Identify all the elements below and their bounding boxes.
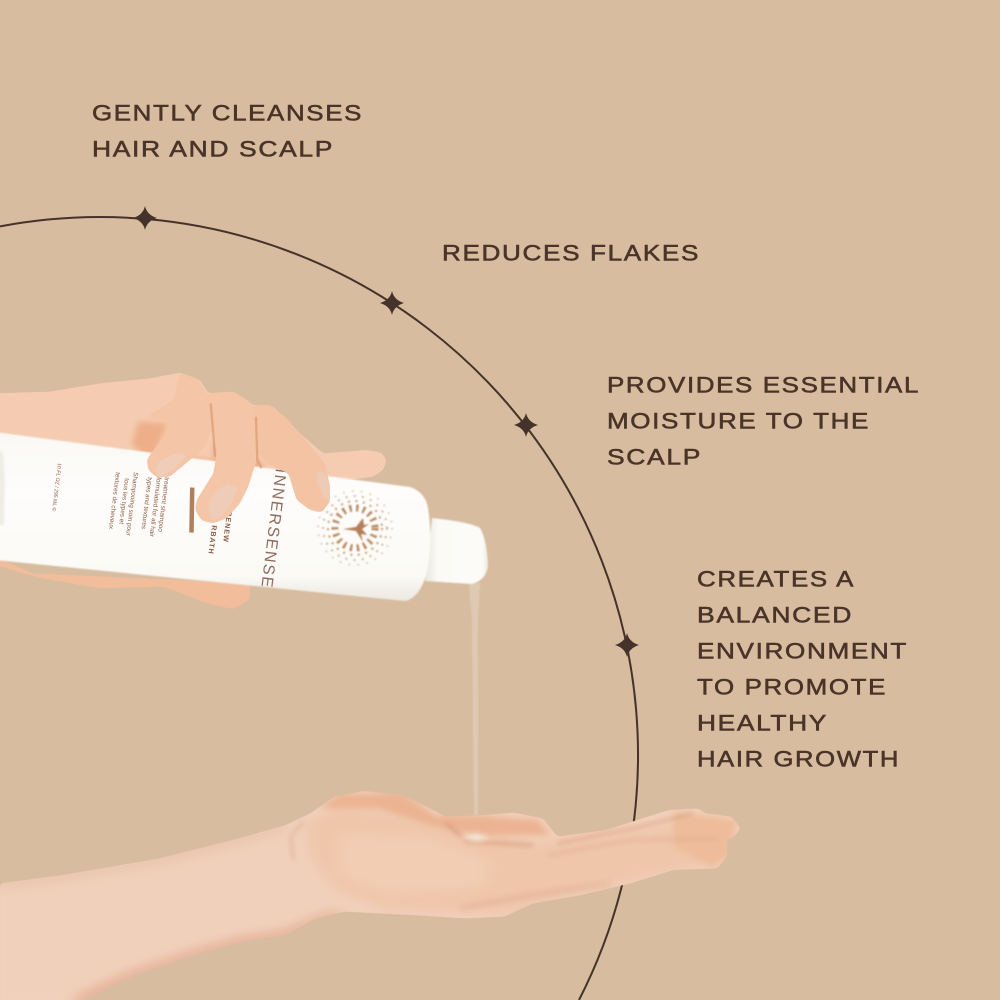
text: balanced environment: BALANCED [697,602,853,628]
product name [206,511,234,555]
description text: tous les types et [117,478,130,525]
bottle label [50,463,392,590]
description text [107,472,170,538]
description text: treatment shampoo [156,477,170,533]
text: balanced environment [697,566,908,772]
description text: textures de cheveux [107,472,121,530]
bottle nozzle [425,518,488,584]
index finger [147,373,212,477]
text: gently cleanses: HAIR AND SCALP [92,136,334,162]
icon: star marker 4 [615,633,639,657]
text: balanced environment: CREATES A [697,566,855,592]
brand name: INNERSENSE [257,468,289,590]
text: gently cleanses: GENTLY CLEANSES [92,100,363,126]
ring finger [253,405,330,513]
index fingernail [156,453,185,477]
text: balanced environment: HEALTHY [697,710,828,736]
icon: star marker 2 [380,291,404,315]
arc line [0,217,638,1000]
icon: star marker 3 [514,413,538,437]
middle fingernail [208,484,237,520]
text: essential moisture [607,372,920,470]
upper hand fingers [147,373,330,523]
description text: formulated for all hair [148,477,162,538]
finger creases [211,403,262,468]
icon: brand sunburst logo [318,491,392,565]
fingernails [156,453,329,520]
bottle body [0,432,430,601]
bottle [0,432,488,601]
text: essential moisture: MOISTURE TO THE [607,408,870,434]
product name: RBATH [206,525,219,555]
text: gently cleanses [92,100,363,162]
description text: Shampooing soin pour [124,472,139,537]
upper hand behind bottle [0,373,387,609]
text: essential moisture: SCALP [607,444,702,470]
volume text: 10 FL OZ / 295 ML © [50,463,63,512]
bottle end shade [0,450,5,525]
text: balanced environment: TO PROMOTE [697,674,887,700]
text: balanced environment: HAIR GROWTH [697,746,900,772]
product name: RENEW [221,511,234,543]
text: balanced environment: ENVIRONMENT [697,638,908,664]
icon: star marker 1 [133,206,157,230]
text: reduces flakes: REDUCES FLAKES [442,240,700,266]
shampoo stream [469,583,480,815]
middle finger [195,392,257,523]
lower hand and forearm [0,791,741,1000]
text: essential moisture: PROVIDES ESSENTIAL [607,372,920,398]
ring fingernail [316,469,329,502]
divider bar [189,488,194,533]
description text: types and textures [140,477,153,529]
